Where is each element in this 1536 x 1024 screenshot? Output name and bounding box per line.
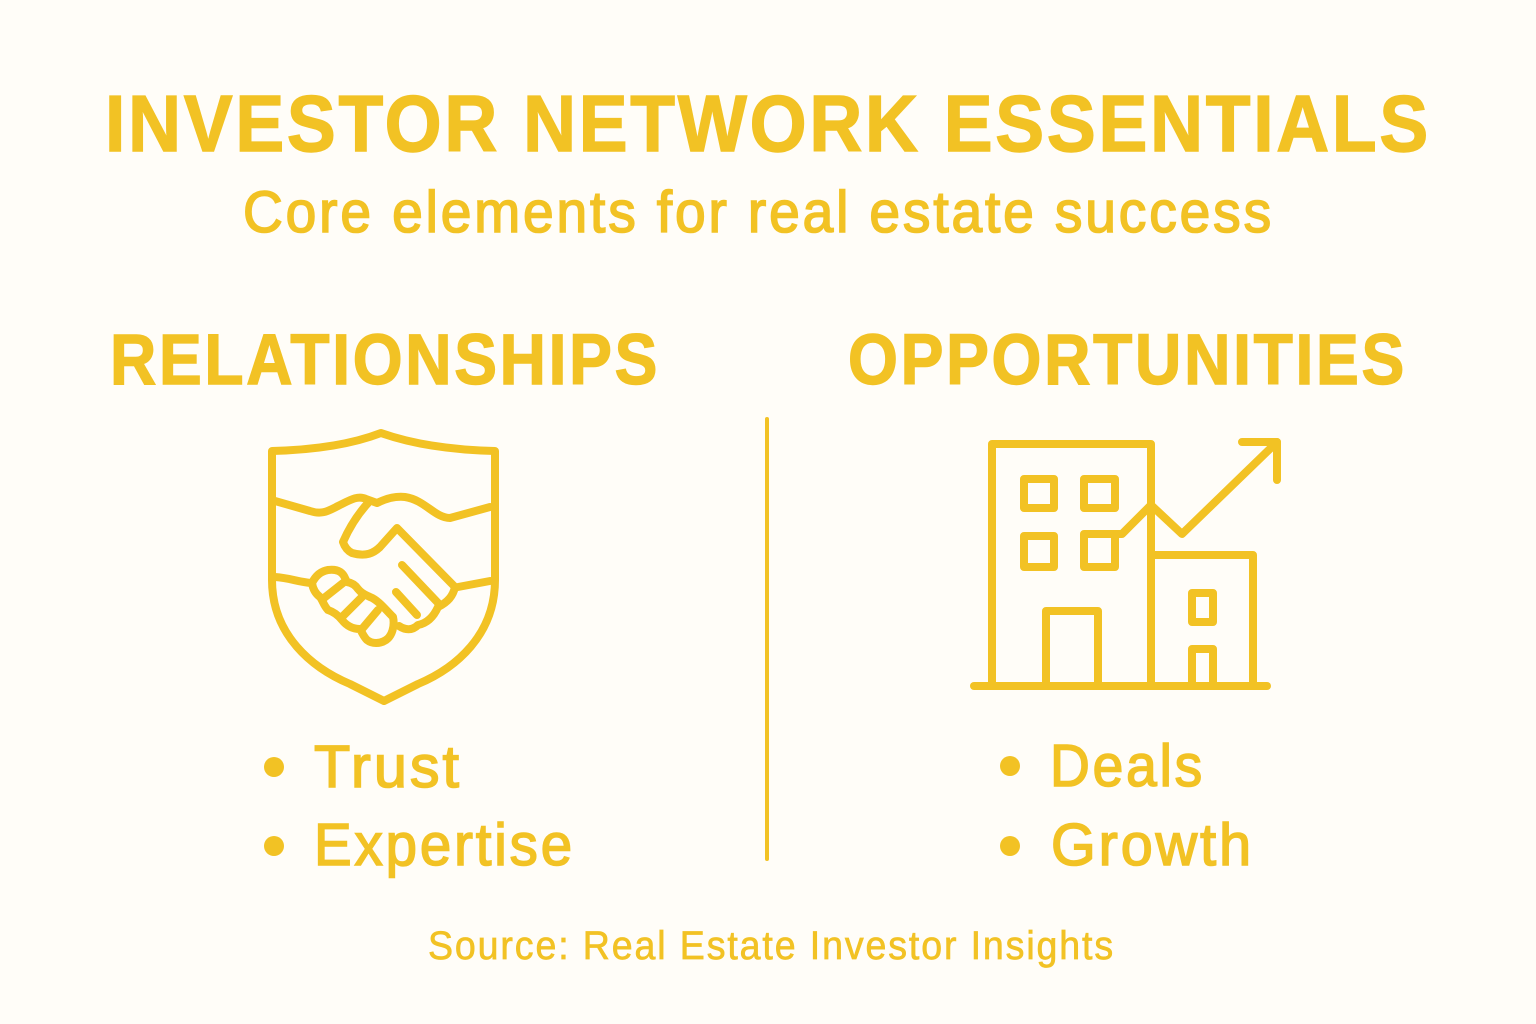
heading: relationships: RELATIONSHIPS — [110, 321, 660, 400]
heading: opportunities: OPPORTUNITIES — [848, 321, 1407, 400]
title: INVESTOR NETWORK ESSENTIALS — [105, 79, 1431, 168]
list: relationships: Expertise — [314, 812, 575, 878]
icon: buildings with growth arrow — [974, 442, 1277, 686]
list: opportunities: Growth — [1051, 812, 1254, 878]
list: opportunities: Deals — [1050, 733, 1205, 799]
list: relationships — [264, 734, 575, 878]
icon: handshake in shield — [272, 433, 495, 701]
divider — [765, 419, 769, 859]
list: opportunities — [1000, 733, 1254, 878]
list: relationships: Trust — [314, 734, 462, 800]
source: Source: Real Estate Investor Insights — [428, 924, 1115, 968]
subtitle: Core elements for real estate success — [243, 180, 1274, 245]
